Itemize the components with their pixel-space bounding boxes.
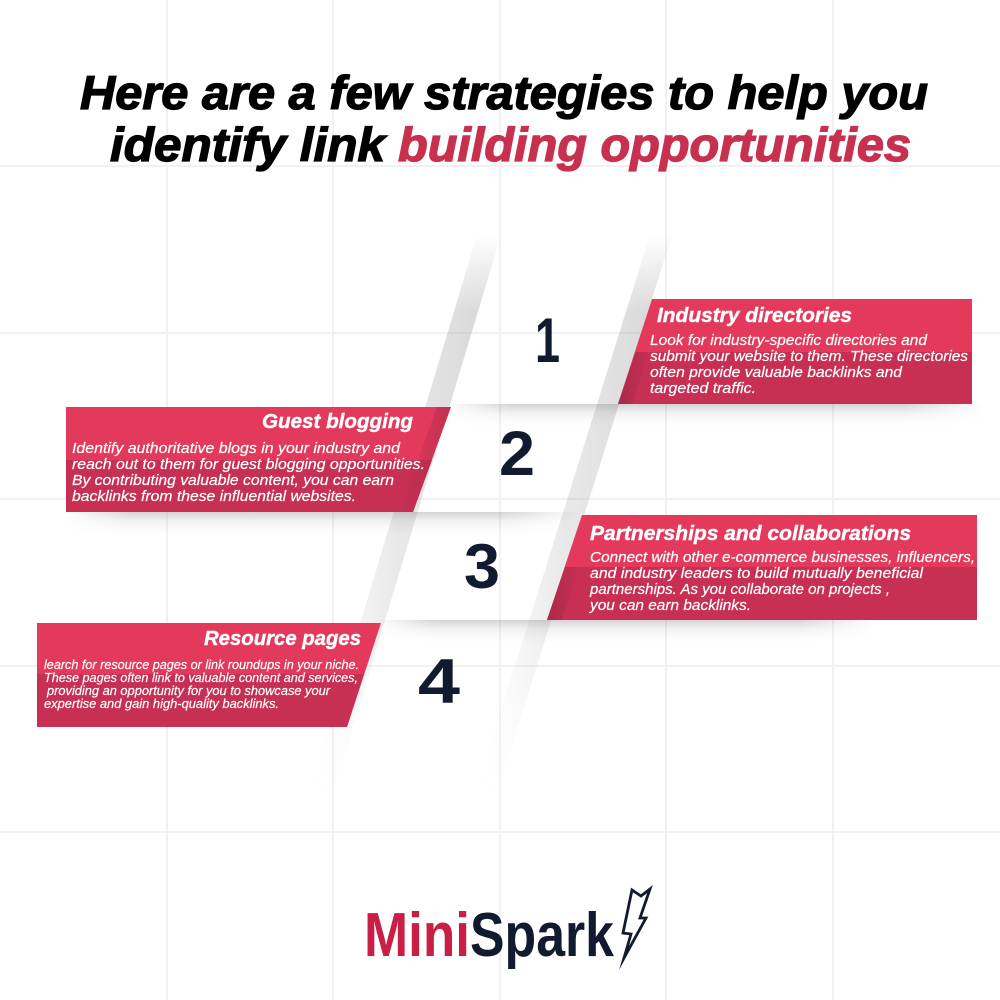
logo: MiniSpark bbox=[364, 889, 650, 970]
text: resource pages body: These pages often link to valuable content and services, bbox=[44, 670, 358, 685]
text: resource pages body: expertise and gain high-quality backlinks. bbox=[44, 696, 279, 711]
text: guest blogging body: reach out to them for guest blogging opportunities. bbox=[72, 457, 425, 473]
number 2: 2 bbox=[499, 419, 535, 489]
diagonal fold shadows bbox=[360, 250, 666, 694]
text: partnerships body: partnerships. As you collaborate on projects , bbox=[589, 582, 890, 598]
panel: industry directories bbox=[618, 299, 972, 404]
number 3: 3 bbox=[464, 532, 500, 602]
icon: lightning bolt bbox=[623, 889, 650, 958]
panel: guest blogging bbox=[66, 407, 451, 512]
heading: industry directories: Industry directories bbox=[657, 305, 852, 327]
logo wordmark: Spark: Spark bbox=[470, 901, 614, 970]
text: resource pages body: learch for resource pages or link roundups in your niche. bbox=[44, 657, 359, 672]
title: identify link bbox=[110, 118, 388, 171]
text: guest blogging body: By contributing valuable content, you can earn bbox=[72, 473, 394, 489]
text: resource pages body bbox=[44, 657, 359, 711]
title bbox=[80, 66, 928, 171]
title: building opportunities bbox=[398, 118, 911, 171]
text: partnerships body: Connect with other e-commerce businesses, influencers, bbox=[590, 550, 975, 566]
text: industry directories body: often provide valuable backlinks and bbox=[650, 365, 903, 381]
number 1: 1 bbox=[535, 306, 560, 376]
heading: guest blogging: Guest blogging bbox=[262, 411, 413, 433]
horizontal panel shadows bbox=[66, 404, 985, 642]
text: guest blogging body: backlinks from these influential websites. bbox=[72, 489, 356, 505]
text: industry directories body bbox=[650, 333, 968, 397]
text: partnerships body: you can earn backlinks. bbox=[589, 598, 751, 614]
text: partnerships body bbox=[589, 550, 975, 614]
text: industry directories body: Look for industry-specific directories and bbox=[650, 333, 928, 349]
title: Here are a few strategies to help you bbox=[80, 66, 928, 119]
heading: resource pages: Resource pages bbox=[204, 628, 361, 650]
text: industry directories body: targeted traffic. bbox=[650, 381, 756, 397]
text: partnerships body: and industry leaders to build mutually beneficial bbox=[590, 566, 924, 582]
heading: partnerships and collaborations: Partnerships and collaborations bbox=[590, 523, 911, 545]
text: resource pages body: providing an opportunity for you to showcase your bbox=[46, 683, 331, 698]
panel: resource pages bbox=[37, 623, 381, 727]
text: guest blogging body: Identify authoritative blogs in your industry and bbox=[72, 441, 401, 457]
logo wordmark: Mini: Mini bbox=[364, 901, 470, 970]
number 4: 4 bbox=[418, 647, 460, 717]
panel: partnerships and collaborations bbox=[547, 515, 977, 620]
text: industry directories body: submit your website to them. These directories bbox=[650, 349, 968, 365]
text: guest blogging body bbox=[72, 441, 425, 505]
